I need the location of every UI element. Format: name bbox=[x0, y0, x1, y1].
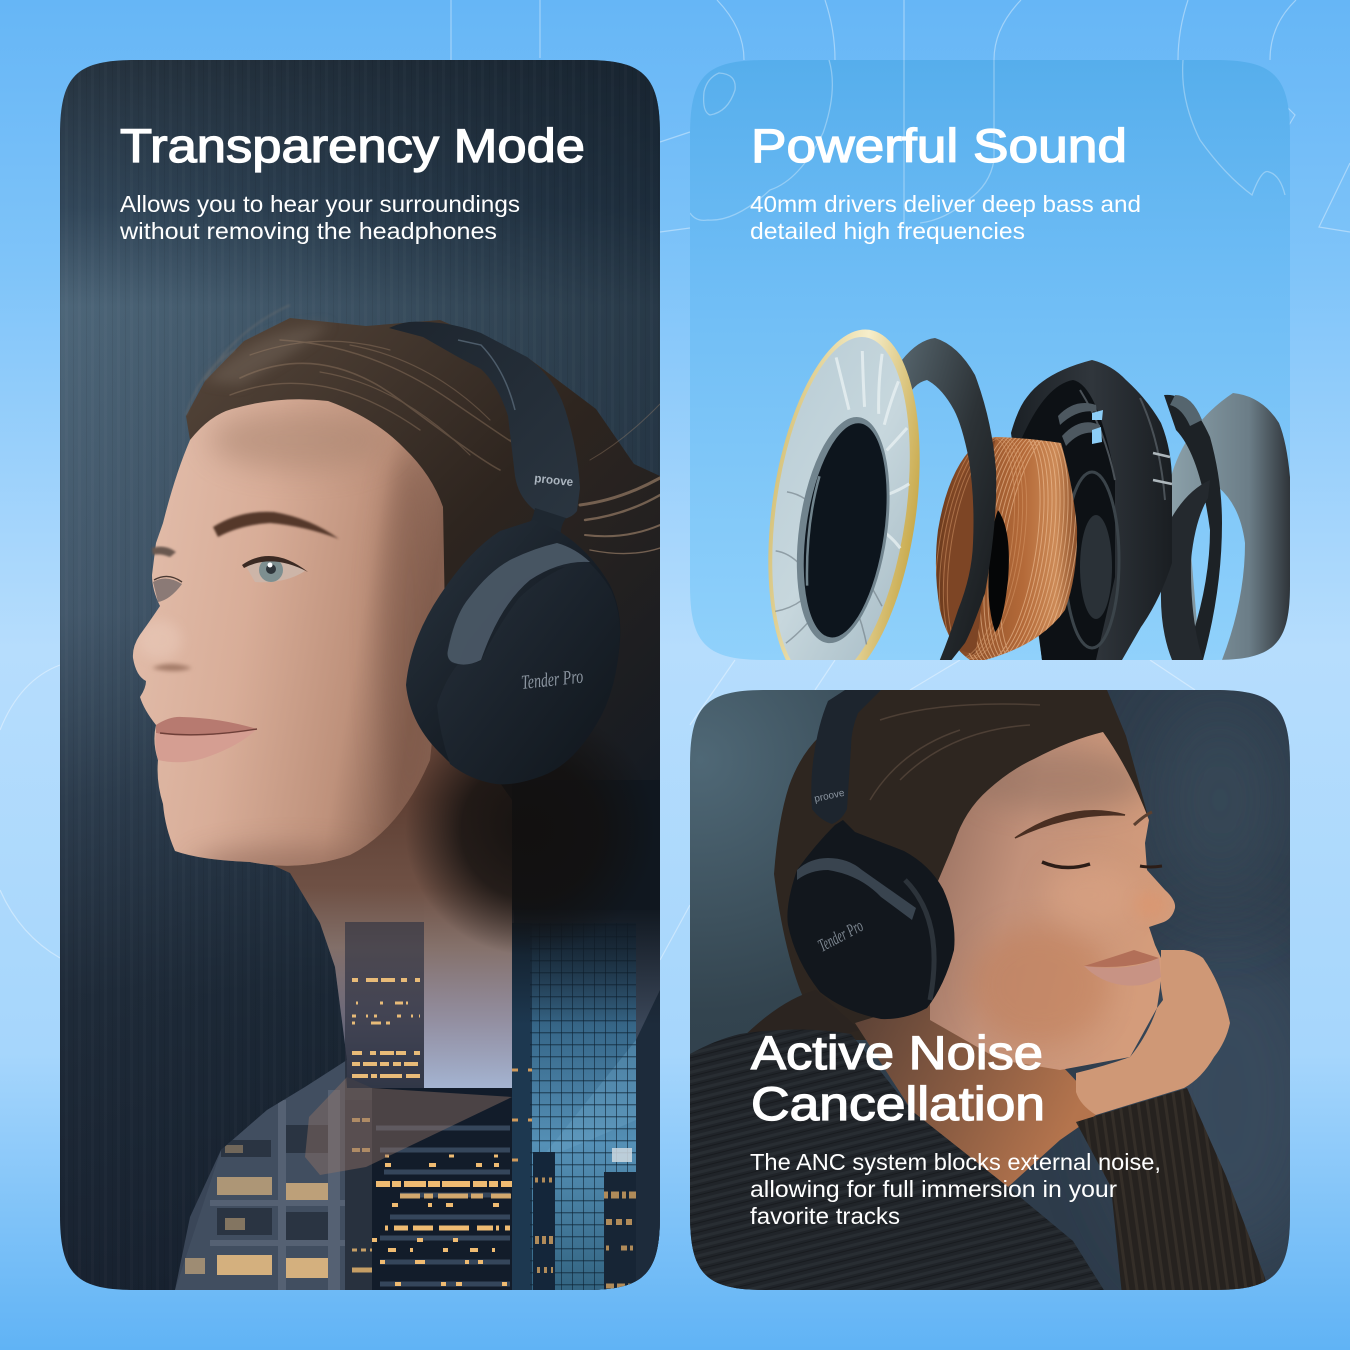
panel: powerful sound bbox=[690, 60, 1292, 700]
illustration: neck bbox=[273, 744, 512, 1082]
illustration: voice coil bbox=[936, 437, 1078, 660]
illustration: magnet frame bbox=[1011, 360, 1172, 660]
text block bbox=[750, 191, 1141, 244]
illustration: hand bbox=[1076, 950, 1230, 1115]
text block: without removing the headphones bbox=[119, 218, 497, 244]
text block: Allows you to hear your surroundings bbox=[120, 191, 520, 217]
text block bbox=[750, 1153, 1159, 1224]
heading: Active Noise bbox=[751, 1026, 1043, 1079]
heading: Transparency Mode bbox=[120, 119, 585, 172]
text: proove logo: proove bbox=[534, 471, 574, 489]
panel: active noise cancellation bbox=[690, 690, 1340, 1295]
illustration: neck bbox=[855, 1000, 1096, 1187]
illustration: face bbox=[133, 399, 445, 888]
illustration: rear rings bbox=[1161, 395, 1222, 660]
illustration: driver diaphragm bbox=[768, 330, 920, 660]
panel: transparency mode bbox=[60, 60, 670, 1300]
icon: ear cup bbox=[406, 520, 620, 784]
icon: headband bbox=[811, 690, 881, 824]
icon: headband bbox=[390, 322, 580, 532]
icon: ear cup bbox=[787, 820, 955, 1019]
illustration: hair bbox=[740, 690, 1149, 1045]
text block: favorite tracks bbox=[750, 1203, 900, 1229]
illustration: face bbox=[930, 732, 1175, 1070]
text block: detailed high frequencies bbox=[750, 218, 1025, 244]
text block: 40mm drivers deliver deep bass and bbox=[750, 191, 1141, 217]
icon: ear cup: Tender Pro bbox=[814, 915, 866, 956]
heading bbox=[750, 1034, 1042, 1122]
text block bbox=[119, 191, 520, 244]
illustration: black gasket ring bbox=[902, 338, 996, 662]
illustration: rear disk bbox=[1170, 393, 1292, 660]
illustration: city in silhouette bbox=[175, 920, 660, 1290]
illustration: hair bbox=[186, 305, 660, 800]
text block: The ANC system blocks external noise, bbox=[750, 1149, 1161, 1175]
illustration: facial features bbox=[152, 512, 339, 762]
icon: headband: proove bbox=[813, 788, 846, 805]
illustration: sleeve bbox=[1076, 1088, 1270, 1295]
illustration: dim tower through neck bbox=[345, 922, 424, 1088]
illustration: skin collar overlay bbox=[305, 1077, 512, 1175]
illustration: sweater bbox=[690, 1030, 1107, 1295]
text block: allowing for full immersion in your bbox=[750, 1176, 1117, 1202]
illustration: hair shadow behind neck bbox=[412, 751, 660, 1016]
text: tender pro logo: Tender Pro bbox=[520, 666, 584, 694]
heading: Powerful Sound bbox=[751, 119, 1127, 172]
heading: Cancellation bbox=[751, 1077, 1045, 1130]
illustration: facial features bbox=[1015, 811, 1162, 986]
